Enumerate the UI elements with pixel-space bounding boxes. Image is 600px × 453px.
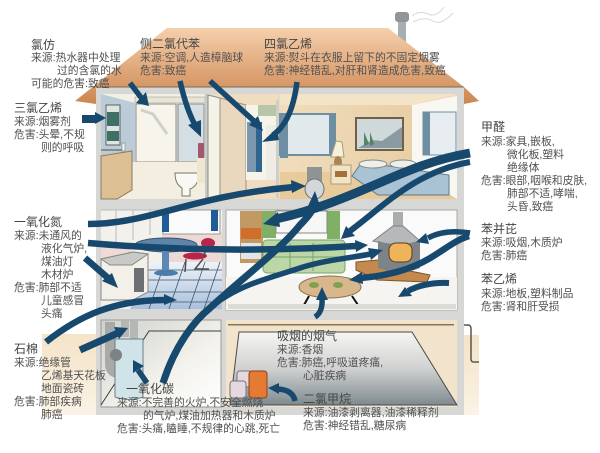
panel: basement left [101, 320, 221, 407]
text: dichloromethane: 二氯甲烷 [303, 392, 351, 406]
icon: shower head [141, 110, 167, 134]
text: styrene [481, 272, 573, 313]
text: styrene: 苯乙烯 [481, 272, 517, 286]
arrows [46, 81, 470, 401]
text: asbestos: 石棉 [14, 342, 38, 356]
icon: outside pipe [464, 325, 479, 362]
text: benzopyrene: 苯并芘 [481, 221, 517, 236]
text: asbestos: 乙烯基天花板 [41, 368, 106, 382]
icon: air purifier [307, 167, 322, 183]
arrow: perchloroethylene [262, 82, 297, 142]
bathroom [101, 94, 205, 199]
text: chloroform: 氯仿 [31, 38, 55, 52]
roof [75, 28, 479, 104]
text: chloroform: 来源:热水器中处理 [31, 50, 121, 64]
stove [101, 252, 148, 300]
text: asbestos: 危害:肺部疾病 [14, 394, 82, 408]
icon: paint cans [230, 371, 267, 398]
arrow: shower [130, 83, 149, 106]
text: tobacco smoke [277, 328, 383, 382]
text: nitrogen monoxide: 木材炉 [41, 267, 74, 281]
table [135, 238, 197, 252]
text: nitrogen monoxide: 液化气炉, [41, 241, 87, 255]
text: formaldehyde: 甲醛 [481, 119, 505, 134]
bookcase [240, 211, 263, 263]
panel: upstairs rooms [101, 94, 457, 199]
text: dichlorobenzene [140, 37, 243, 77]
sofa [263, 240, 345, 273]
text: dichlorobenzene: 侧二氯代苯 [140, 37, 200, 51]
text: carbon monoxide: 的气炉,煤油加热器和木质炉 [143, 408, 276, 422]
text: nitrogen monoxide [14, 214, 87, 320]
text: perchloroethylene: 危害:神经错乱,对肝和肾造成危害,致癌 [264, 63, 446, 77]
text: trichloroethylene [14, 101, 85, 154]
bedroom [279, 94, 457, 199]
text: tobacco smoke: 危害:肺癌,呼吸道疼痛, [277, 355, 383, 369]
text: formaldehyde: 绝缘体 [507, 160, 540, 174]
text: benzopyrene: 危害:肺癌 [481, 248, 527, 262]
text: perchloroethylene: 来源:熨斗在衣服上留下的不固定烟雾 [264, 50, 440, 64]
window [163, 210, 220, 234]
arrow: water heater [133, 360, 147, 383]
arrow: formaldehyde [263, 153, 470, 227]
background ground panels [42, 334, 479, 415]
text: carbon monoxide: 来源:不完善的火炉,不安全燃烧 [117, 395, 264, 409]
text: asbestos: 来源:绝缘管 [14, 355, 71, 369]
curtains [262, 211, 276, 238]
arrow: kitchen long [88, 240, 368, 252]
chair [183, 238, 215, 272]
text: formaldehyde: 头昏,致癌 [507, 199, 553, 213]
text: perchloroethylene [264, 37, 446, 77]
panel: kitchen [101, 210, 222, 309]
text: asbestos [14, 342, 106, 421]
arrow: closet [210, 81, 263, 131]
icon: air freshener [198, 143, 204, 158]
arrow: stove [85, 258, 118, 288]
arrow: coffee table [315, 287, 328, 317]
text: tobacco smoke: 吸烟的烟气 [277, 328, 337, 343]
icon: pipes and water heater [110, 322, 124, 373]
text: nitrogen monoxide: 来源:未通风的 [14, 228, 82, 242]
arrow: basement to fireplace [205, 248, 383, 312]
text: dichlorobenzene: 危害:致癌 [140, 63, 186, 77]
arrow: formaldehyde second [341, 162, 470, 239]
bed [352, 162, 449, 195]
text: formaldehyde [481, 119, 587, 213]
text: trichloroethylene: 来源:烟雾剂 [14, 114, 71, 128]
arrow: basement to purifier [163, 191, 320, 383]
text: formaldehyde: 微化板,塑料 [507, 147, 564, 161]
arrow: floor [398, 283, 449, 297]
text: trichloroethylene: 危害:头晕,不规 [14, 127, 85, 141]
text: styrene: 来源:地板,塑料制品 [481, 286, 573, 300]
arrow: kitchen floor [46, 294, 177, 342]
text: benzopyrene: 来源:吸烟,木质炉 [481, 235, 563, 249]
arrow: paint cans [268, 383, 295, 401]
arrow: fireplace benzopyrene [416, 232, 470, 244]
picture [356, 118, 403, 150]
text: tobacco smoke: 心脏疾病 [303, 368, 346, 382]
text: dichloromethane [303, 392, 439, 432]
icon: chimney with smoke [395, 7, 453, 42]
icon: cabinet and vanity [101, 151, 132, 199]
text: carbon monoxide [117, 382, 280, 435]
text: asbestos: 地面瓷砖 [41, 381, 84, 395]
text: perchloroethylene: 四氯乙烯 [264, 37, 312, 51]
panel: basement right [226, 320, 457, 407]
text: chloroform [31, 38, 122, 90]
text: carbon monoxide: 一氧化碳 [126, 382, 174, 396]
text: dichloromethane: 来源:油漆剥离器,油漆稀释剂 [303, 405, 439, 419]
text: nitrogen monoxide: 煤油灯 [41, 254, 74, 268]
text: asbestos: 肺癌 [41, 407, 63, 421]
text: benzopyrene [481, 221, 563, 262]
text: carbon monoxide: 危害:头痛,瞌睡,不规律的心跳,死亡 [117, 421, 280, 435]
fireplace [356, 212, 430, 282]
text: nitrogen monoxide: 儿童感冒 [41, 293, 84, 307]
window [280, 114, 335, 155]
arrow: basement pipes [80, 327, 128, 350]
text: formaldehyde: 危害:眼部,咽喉和皮肤, [481, 173, 587, 187]
text: nitrogen monoxide: 头痛 [41, 306, 63, 320]
arrow: spray [82, 112, 106, 124]
panel: living room [226, 210, 457, 310]
house walls [96, 87, 464, 415]
lamp and nightstand [331, 141, 344, 157]
text: styrene: 危害:肾和肝受损 [481, 299, 560, 313]
text: dichloromethane: 危害:神经错乱,糖尿病 [303, 418, 406, 432]
text: chloroform: 过的含氯的水 [57, 63, 122, 77]
closet [205, 94, 279, 199]
arrow: hearth [349, 236, 469, 284]
arrow: air freshener [180, 81, 201, 137]
text: dichlorobenzene: 来源:空调,人造樟脑球 [140, 50, 243, 64]
text: formaldehyde: 肺部不适,哮喘, [507, 186, 578, 200]
arrow: upper long [88, 180, 306, 224]
coffee table [299, 276, 361, 305]
text: nitrogen monoxide: 一氧化氮 [14, 214, 62, 229]
text: chloroform: 可能的危害:致癌 [31, 76, 110, 90]
text: formaldehyde: 来源:家具,嵌板, [481, 134, 555, 148]
text: trichloroethylene: 三氯乙烯 [14, 101, 62, 115]
text: trichloroethylene: 则的呼吸 [41, 140, 84, 154]
text: nitrogen monoxide: 危害:肺部不适 [14, 280, 82, 294]
text: tobacco smoke: 来源:香烟 [277, 342, 323, 356]
icon: toilet [175, 173, 198, 196]
